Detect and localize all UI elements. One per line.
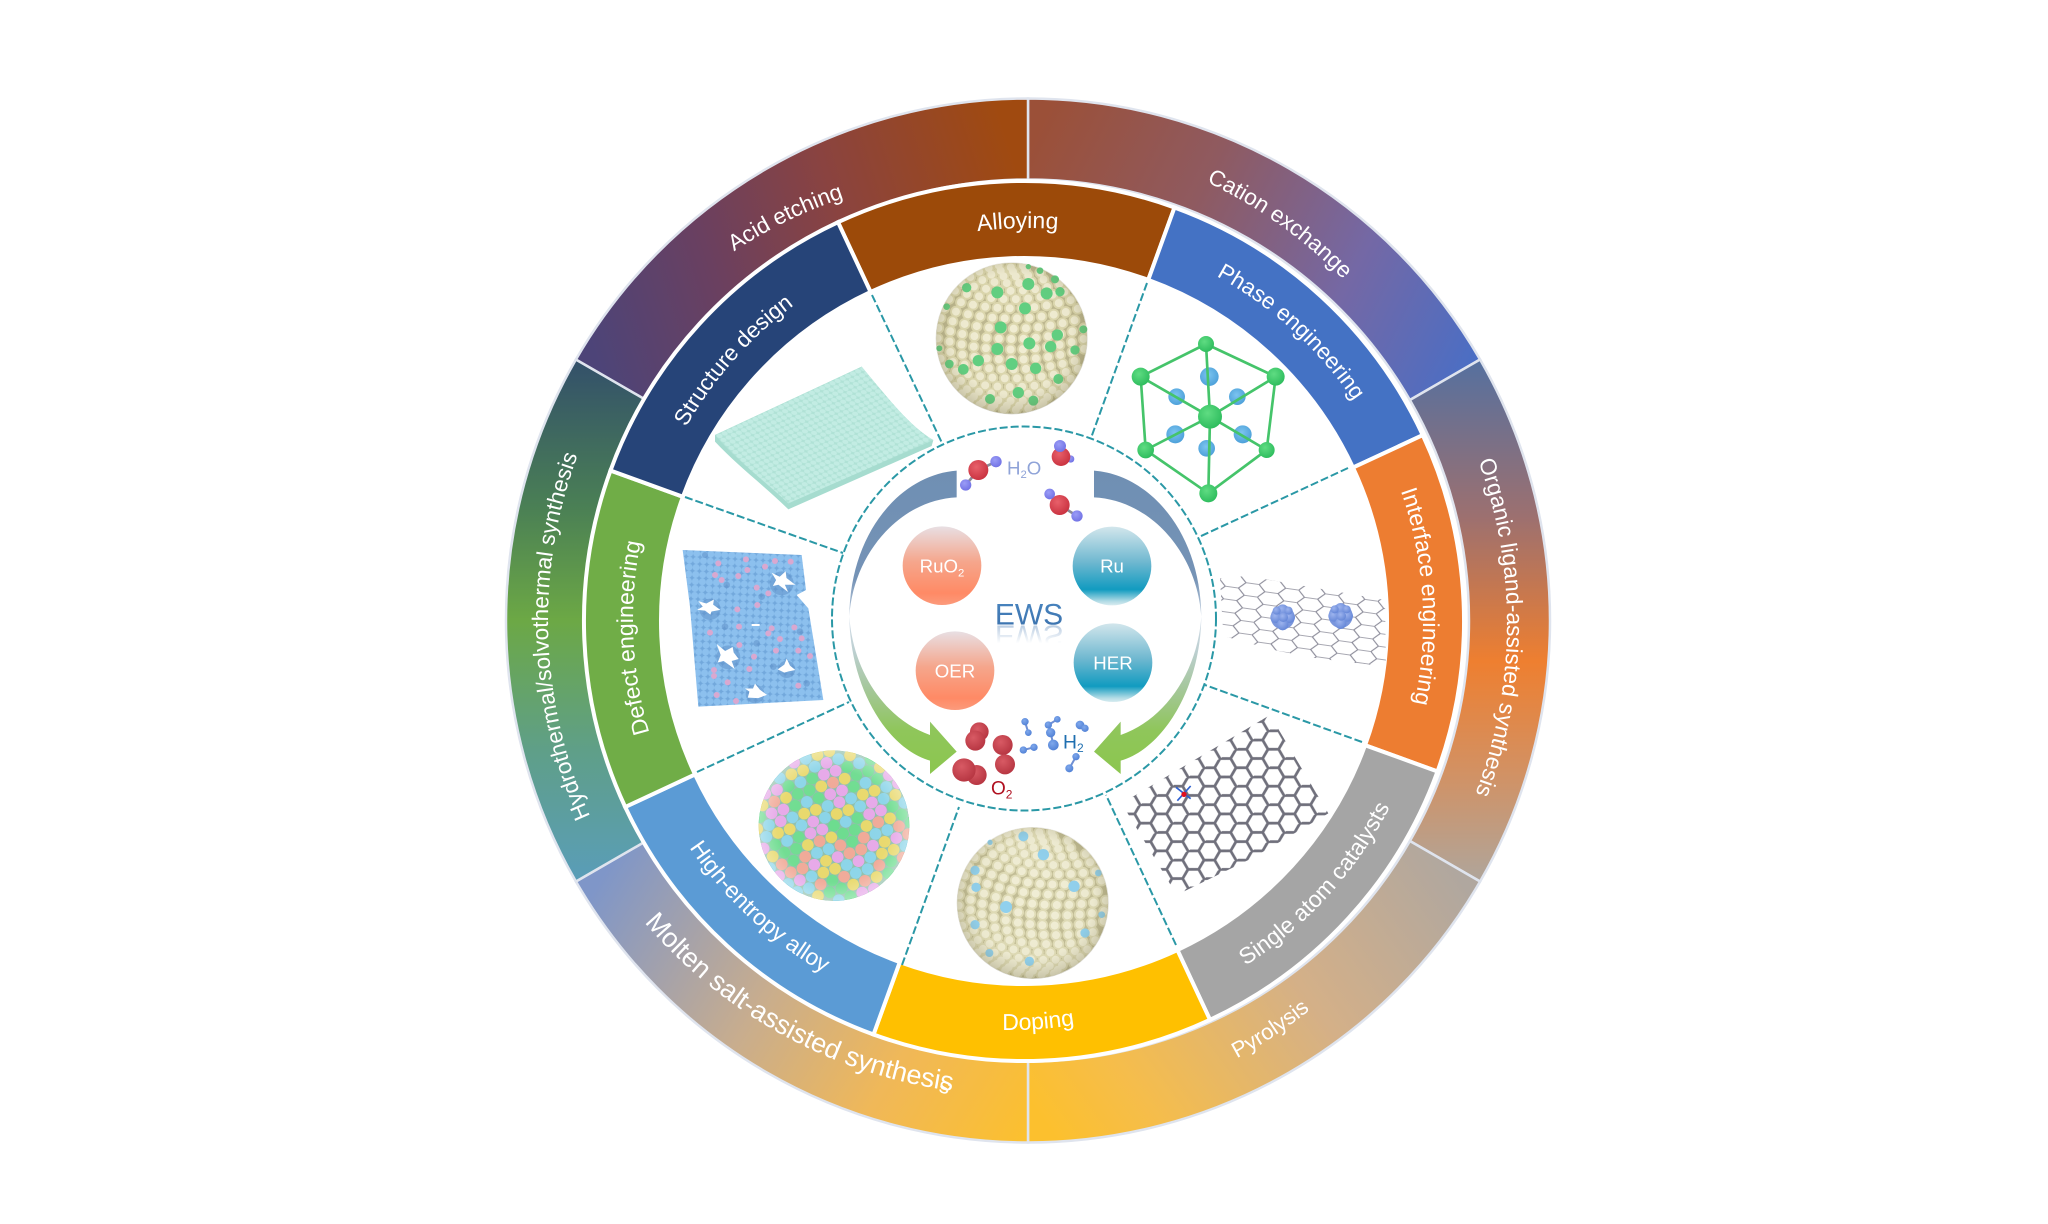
label: Pyrolysis: Pyrolysis: [1231, 1002, 1308, 1058]
illustration: high-entropy alloy nanoparticle: [758, 750, 910, 901]
label: High-entropy alloy: High-entropy alloy: [690, 840, 830, 973]
label: Single atom catalysts: Single atom catalysts: [1240, 803, 1388, 964]
label: O2: 2: [1006, 787, 1013, 801]
segment: Cation exchange: [1028, 98, 1480, 400]
middle ring: catalyst strategies: [582, 179, 1462, 1063]
center: EWS reaction cycle: [849, 440, 1201, 801]
node: HER: HER: [1093, 652, 1133, 673]
illustration: single atom on graphene: [1122, 715, 1328, 895]
segment: High-entropy alloy: [625, 774, 900, 1034]
segment: Molten salt-assisted synthesis: [576, 841, 1028, 1142]
pink dopant atoms: [707, 556, 813, 704]
label: H2: H: [1063, 732, 1077, 753]
label: H2O: 2: [1020, 469, 1027, 481]
label: H2: 2: [1077, 741, 1084, 755]
illustration: defective sheet: [683, 550, 823, 707]
segment: Phase engineering: [1148, 208, 1423, 468]
node: OER: OER: [935, 660, 975, 681]
label: Organic ligand-assisted synthesis: Organic ligand-assisted synthesis: [1476, 458, 1524, 796]
metal cluster: [1328, 603, 1353, 629]
illustration: curved nanosheet: [715, 367, 933, 509]
label: Acid etching: Acid etching: [731, 187, 843, 252]
hydrogen molecules: [1020, 716, 1089, 772]
vacancy shadows: [699, 552, 810, 703]
illustration: alloyed nanoparticle: [936, 262, 1088, 414]
water molecules: [960, 440, 1083, 522]
illustration: phase engineering crystal cell: [1132, 336, 1285, 502]
vacancy holes: [697, 571, 795, 698]
node: OER: [916, 631, 994, 710]
label: Interface engineering: Interface engineering: [1402, 488, 1440, 705]
node: Ru: Ru: [1100, 556, 1124, 577]
segment: Interface engineering: [1353, 435, 1464, 772]
arrow: H2O to O2 (left): [849, 471, 957, 774]
metal cluster: [1270, 604, 1295, 630]
label: Phase engineering: Phase engineering: [1218, 264, 1363, 401]
label: H2O: H: [1007, 458, 1020, 479]
title: EWS: EWS: [995, 618, 1063, 651]
segment: Hydrothermal/solvothermal synthesis: [506, 360, 646, 882]
single atom site: [1176, 786, 1191, 801]
node: RuO2: RuO: [920, 555, 958, 576]
label: stray mirrored glyph: s: [936, 1076, 953, 1103]
label: Hydrothermal/solvothermal synthesis: Hydrothermal/solvothermal synthesis: [532, 453, 590, 821]
title: EWS: EWS: [995, 598, 1063, 631]
label: Defect engineering: Defect engineering: [616, 541, 649, 736]
illustration: interface graphene with clusters: [1220, 576, 1386, 667]
label: Alloying: Alloying: [978, 211, 1058, 234]
segment: Pyrolysis: [1028, 841, 1480, 1142]
outer ring: synthesis methods: [504, 97, 1552, 1144]
label: Cation exchange: Cation exchange: [1210, 170, 1350, 278]
node: RuO2: 2: [958, 567, 964, 579]
node: RuO2: [903, 526, 981, 605]
segment: Defect engineering: [584, 470, 695, 807]
wheel infographic: [504, 97, 1552, 1144]
label: Structure design: Structure design: [675, 298, 793, 425]
dashed center circle: [832, 426, 1216, 810]
label: O2: O: [991, 779, 1006, 800]
label: Molten salt-assisted synthesis: Molten salt-assisted synthesis: [646, 912, 953, 1090]
segment: Acid etching: [576, 98, 1028, 400]
green bonds: [1141, 344, 1276, 493]
label: H2O: O: [1027, 458, 1041, 479]
segment: Alloying: [838, 181, 1174, 292]
ring segments: [584, 181, 1464, 1061]
node: Ru: [1073, 527, 1151, 605]
green corner atoms: [1132, 336, 1285, 502]
illustration: doped nanoparticle: [956, 827, 1109, 979]
label: Doping: Doping: [1004, 1012, 1074, 1034]
segment: Organic ligand-assisted synthesis: [1410, 360, 1550, 882]
segment: Single atom catalysts: [1177, 745, 1438, 1020]
segment: Doping: [874, 950, 1210, 1061]
oxygen molecules: [952, 722, 1015, 785]
blue lattice atoms: [1166, 367, 1252, 457]
title: EWS: [995, 598, 1063, 651]
segment: Structure design: [610, 222, 871, 497]
node: HER: [1074, 623, 1152, 702]
arrow: H2O to H2 (right): [1094, 471, 1201, 774]
